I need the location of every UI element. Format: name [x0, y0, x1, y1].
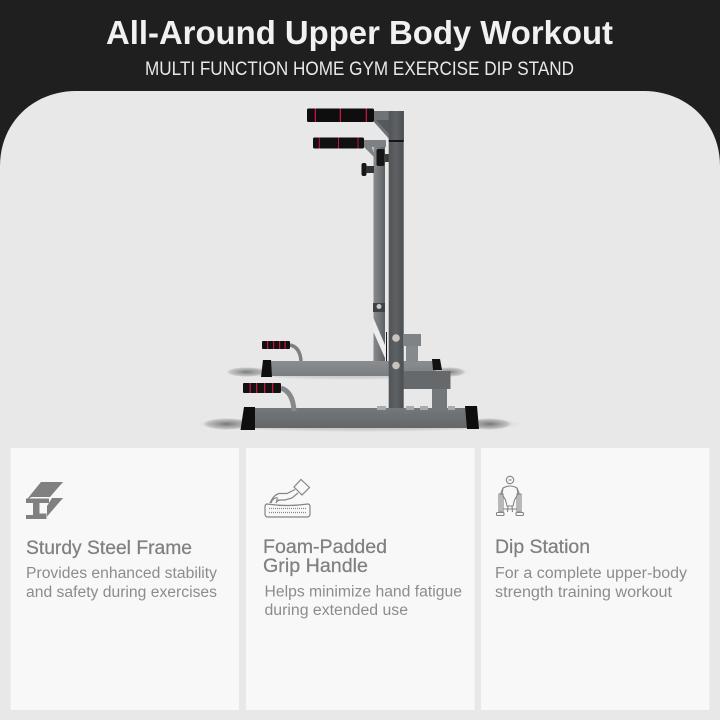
front right foot	[465, 406, 479, 429]
description	[495, 565, 687, 601]
front dip bar	[240, 108, 479, 430]
rear dip bar	[261, 138, 442, 377]
rear left foot	[261, 360, 272, 377]
folding bracket	[373, 303, 387, 367]
icon: hand pressing foam	[265, 480, 310, 517]
heading	[263, 536, 387, 577]
front grip	[307, 108, 374, 122]
base bolts	[377, 406, 455, 410]
description: Provides enhanced stability	[26, 565, 217, 582]
rear low handle	[262, 341, 301, 361]
card: Dip Station	[481, 448, 710, 710]
product photo: dip stand	[195, 108, 525, 432]
rear base	[268, 361, 436, 376]
subtitle: MULTI FUNCTION HOME GYM EXERCISE DIP STAND	[145, 59, 574, 80]
description: strength training workout	[495, 584, 673, 601]
description: and safety during exercises	[26, 584, 217, 601]
description	[264, 584, 462, 619]
heading: Grip Handle	[263, 555, 368, 577]
description: For a complete upper-body	[495, 565, 687, 582]
rear upright	[374, 140, 385, 364]
front left foot	[240, 407, 255, 430]
header band	[0, 0, 720, 180]
description: Helps minimize hand fatigue	[264, 584, 462, 600]
frame bolts	[392, 334, 400, 369]
front step	[404, 371, 450, 411]
heading: Foam-Padded	[263, 536, 387, 558]
heading: Dip Station	[495, 536, 590, 558]
card: Sturdy Steel Frame	[10, 448, 239, 710]
card: Foam-Padded Grip Handle	[246, 448, 474, 710]
front arm	[374, 111, 404, 141]
icon: steel I-beam	[26, 482, 63, 519]
floor shadows	[195, 364, 525, 432]
rear grip	[313, 138, 364, 148]
description: during extended use	[264, 602, 408, 619]
rear step	[404, 334, 421, 362]
front upright	[389, 111, 404, 413]
description	[26, 565, 217, 601]
front base	[252, 408, 467, 428]
adjustment knobs	[362, 149, 389, 176]
heading: Sturdy Steel Frame	[26, 537, 192, 559]
front low handle	[243, 383, 294, 411]
title: All-Around Upper Body Workout	[106, 14, 613, 51]
rear right foot	[432, 359, 442, 370]
icon: person on dip bars	[496, 476, 524, 516]
rear arm	[364, 140, 386, 158]
